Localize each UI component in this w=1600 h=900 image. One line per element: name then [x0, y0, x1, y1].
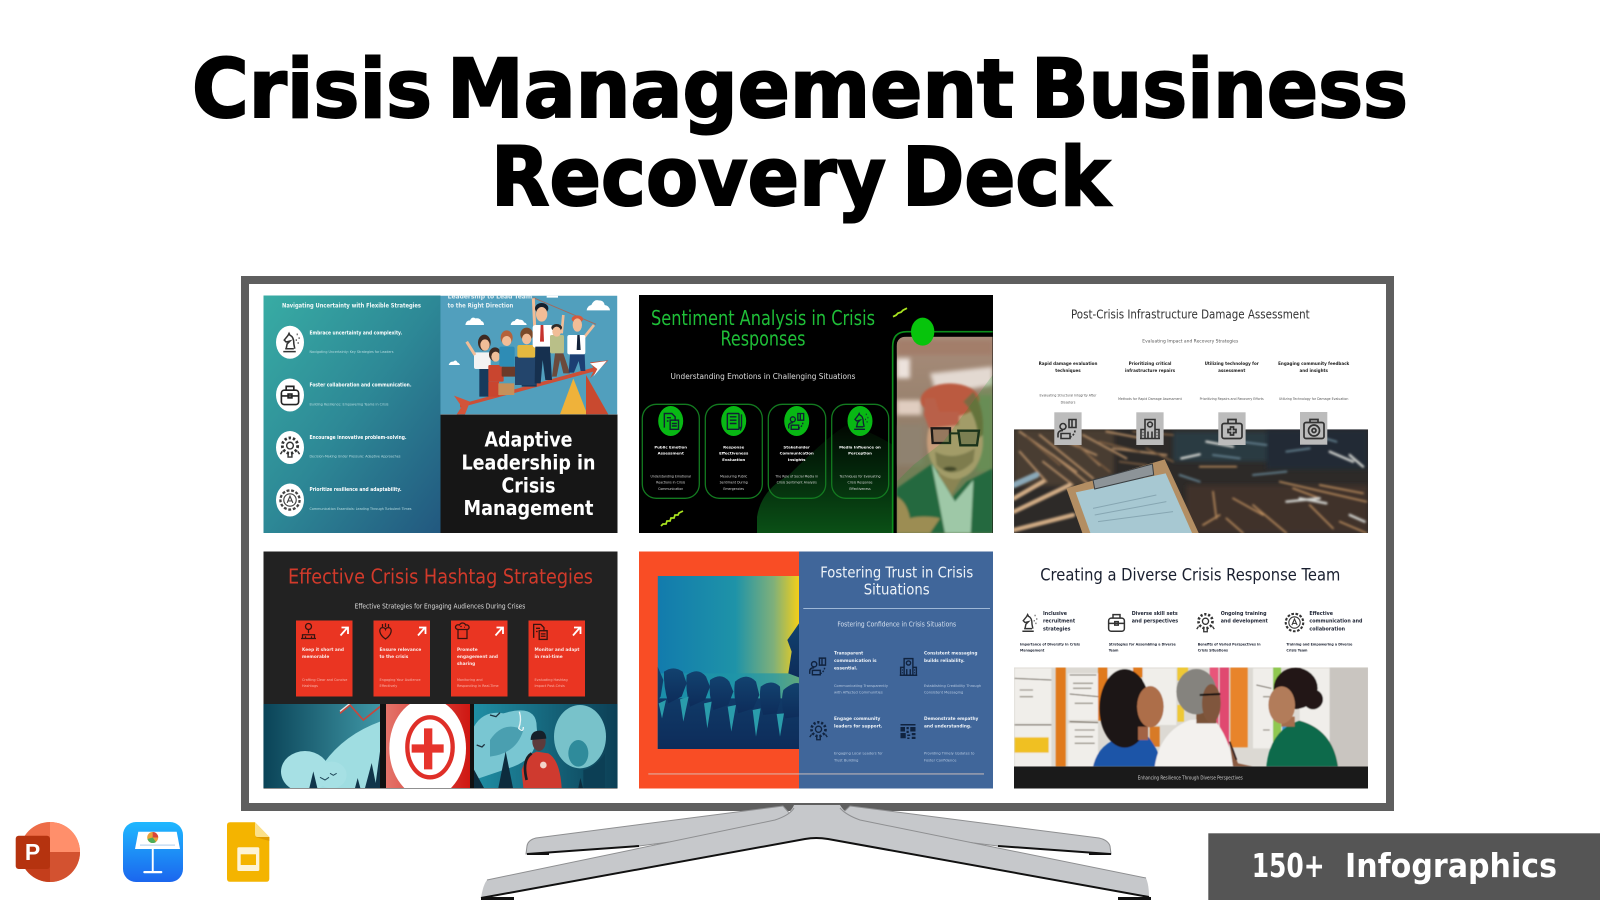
- card 4: Media Influence on: [839, 444, 881, 449]
- illustration: team on arrow: to the Right Direction: [448, 303, 513, 310]
- slide title: Management: [464, 496, 594, 520]
- item 4: collaboration: [1309, 626, 1346, 632]
- left panel list: Foster collaboration and communication.: [310, 382, 412, 388]
- card 3: Promote: [457, 647, 478, 653]
- item 1: Importance of Diversity in Crisis: [1020, 642, 1080, 646]
- card 3: sharing: [457, 661, 475, 667]
- card 2: Measuring Public: [720, 475, 747, 479]
- item 3: and development: [1221, 618, 1269, 624]
- card 2: Sentiment During: [720, 481, 748, 485]
- item 1: Transparent: [834, 650, 863, 656]
- left panel list: [310, 330, 412, 511]
- card 4: Evaluating Hashtag: [534, 678, 568, 682]
- item 1: Communicating Transparently: [834, 684, 889, 688]
- bottom rule: [648, 772, 984, 775]
- icon tiles: [1054, 412, 1327, 445]
- item 3: Ongoing training: [1221, 611, 1267, 617]
- subtitle: Fostering Confidence in Crisis Situations: [837, 620, 957, 628]
- item 4: Training and Empowering a Diverse: [1286, 642, 1353, 646]
- column notes: [1040, 394, 1348, 404]
- black background: [639, 295, 993, 533]
- item 4: Providing Timely Updates to: [924, 752, 975, 756]
- card 1: Understanding Emotional: [650, 475, 691, 479]
- monitor frame: [245, 280, 1390, 807]
- item 1: essential.: [834, 666, 858, 672]
- photo: man in glasses: [893, 318, 993, 533]
- card 3: [768, 404, 826, 498]
- title rule: [803, 607, 990, 610]
- card 1: Public Emotion: [654, 444, 687, 449]
- left panel list: Navigating Uncertainty: Key Strategies for Leaders: [310, 350, 394, 354]
- item 1: Inclusive: [1043, 611, 1068, 617]
- slide title: [820, 564, 973, 598]
- slide: hashtag strategies: [263, 552, 618, 798]
- green wave: [757, 425, 893, 533]
- column notes: Methods for Rapid Damage Assessment: [1118, 397, 1183, 401]
- item 1: recruitment: [1043, 618, 1076, 624]
- item 2: [1109, 611, 1178, 652]
- slide: fostering trust: [639, 552, 993, 788]
- card 1: memorable: [302, 654, 329, 660]
- left panel list: Communication Essentials: Leading Through Turbulent Times: [310, 507, 412, 511]
- item 4: [900, 716, 979, 762]
- card 4: Perception: [848, 451, 872, 456]
- title: Management: [447, 43, 1014, 137]
- badge: 150+ Infographics: [1208, 833, 1600, 900]
- slide: adaptive leadership: [264, 294, 618, 533]
- card 3: Communication: [780, 451, 814, 456]
- slide title: Post-Crisis Infrastructure Damage Assessment: [1071, 306, 1310, 321]
- icon: PowerPoint: P: [25, 839, 40, 865]
- item 3: Engage community: [834, 716, 881, 722]
- card 1: [642, 404, 699, 498]
- item 3: Trust Building: [833, 758, 858, 762]
- title: Deck: [902, 131, 1112, 225]
- card 1: Communication: [658, 487, 683, 491]
- card 1: Crafting Clear and Concise: [302, 678, 347, 682]
- item 4: Effective: [1309, 611, 1334, 617]
- slide title: Effective Crisis Hashtag Strategies: [288, 564, 593, 588]
- item 1: [810, 650, 889, 694]
- card 2: Effectively: [380, 684, 397, 688]
- item 4: and understanding.: [924, 724, 972, 730]
- card 3: Stakeholder: [783, 444, 810, 449]
- left panel heading: Navigating Uncertainty with Flexible Strategies: [282, 302, 421, 310]
- item 3: Crisis Situations: [1198, 648, 1228, 652]
- slide title: Fostering Trust in Crisis: [820, 564, 973, 582]
- card 3: Insights: [788, 457, 806, 462]
- card 2: Effectiveness: [719, 451, 749, 456]
- dark title panel: [440, 414, 618, 533]
- card 4: Monitor and adapt: [534, 647, 579, 653]
- card 2: Emergencies: [723, 487, 744, 491]
- card 4: Crisis Response: [848, 481, 873, 485]
- column notes: Evaluating Structural Integrity After: [1040, 394, 1097, 398]
- card 1: Reactions in Crisis: [656, 481, 686, 485]
- card 2: to the crisis: [380, 654, 409, 660]
- column notes: Utilizing Technology for Damage Evaluation: [1279, 397, 1348, 401]
- card 1: [296, 620, 352, 696]
- icon: Google Slides: [227, 822, 269, 882]
- card 4: Effectiveness: [849, 487, 871, 491]
- slide title: [651, 306, 875, 350]
- item 3: Benefits of Varied Perspectives in: [1198, 642, 1261, 646]
- card 3: Monitoring and: [457, 678, 483, 682]
- item 3: [810, 716, 883, 762]
- slide title: [462, 428, 596, 520]
- item 4: communication and: [1309, 618, 1363, 624]
- slide title: Leadership in: [462, 450, 596, 474]
- title: [192, 43, 1408, 225]
- icon: Keynote: [123, 822, 183, 882]
- item 3: [1197, 611, 1269, 652]
- slide title: Situations: [864, 580, 930, 598]
- item 1: communication is: [834, 658, 877, 664]
- item 2: Strategies for Assembling a Diverse: [1109, 642, 1176, 646]
- item 2: Consistent Messaging: [924, 690, 963, 694]
- item 3: Engaging Local Leaders for: [834, 752, 883, 756]
- slide title: Crisis: [502, 474, 556, 498]
- item 2: Consistent messaging: [924, 650, 977, 656]
- decorative squiggles: [661, 308, 907, 526]
- monitor stand: [481, 805, 1151, 900]
- left panel list: Embrace uncertainty and complexity.: [310, 330, 402, 336]
- left panel list: Decision-Making Under Pressure: Adaptive Approaches: [310, 454, 401, 458]
- badge: 150+ Infographics: Infographics: [1345, 846, 1557, 885]
- item 3: leaders for support.: [834, 724, 883, 730]
- column notes: Disasters: [1061, 400, 1076, 404]
- left teal panel: [264, 296, 440, 533]
- item 1: with Affected Communities: [834, 690, 883, 694]
- item 4: Demonstrate empathy: [924, 716, 979, 722]
- image: silhouettes: [658, 576, 799, 749]
- card 2: Ensure relevance: [380, 647, 421, 653]
- item 2: Diverse skill sets: [1132, 611, 1178, 617]
- card 2: Evaluation: [722, 457, 746, 462]
- column headings: and insights: [1299, 368, 1328, 373]
- slide title: Creating a Diverse Crisis Response Team: [1040, 566, 1340, 586]
- item 2: Establishing Credibility Through: [924, 684, 981, 688]
- left panel list: Prioritize resilience and adaptability.: [310, 487, 402, 493]
- card 1: Hashtags: [302, 684, 318, 688]
- slide: infrastructure damage: [1014, 306, 1368, 533]
- item 4: [1286, 611, 1363, 652]
- card 2: Engaging Your Audience: [380, 678, 421, 682]
- column headings: techniques: [1055, 368, 1081, 373]
- icon circles: [276, 326, 304, 516]
- card 2: [374, 620, 430, 696]
- column headings: Prioritizing critical: [1129, 361, 1172, 366]
- badge: 150+ Infographics: 150+: [1252, 846, 1325, 885]
- blue panel: [799, 552, 993, 788]
- column headings: infrastructure repairs: [1125, 368, 1176, 373]
- column headings: assessment: [1218, 368, 1245, 373]
- card 3: [451, 620, 508, 696]
- illustration: team on arrow: [440, 294, 617, 414]
- illustration: team on arrow: Leadership to Lead Team: [448, 294, 532, 301]
- card 1: Keep it short and: [302, 647, 344, 653]
- caption: Enhancing Resilience Through Diverse Perspectives: [1138, 776, 1243, 782]
- column headings: Rapid damage evaluation: [1039, 361, 1097, 366]
- icon: PowerPoint: [16, 822, 80, 882]
- item 2: and perspectives: [1132, 618, 1178, 624]
- card 4: [832, 404, 889, 498]
- dark background: [264, 552, 618, 788]
- slide title: Sentiment Analysis in Crisis: [651, 306, 875, 330]
- slide title: Responses: [720, 326, 806, 350]
- item 2: Team: [1109, 648, 1119, 652]
- item 1: [1020, 611, 1080, 652]
- item 4: Foster Confidence: [924, 758, 957, 762]
- column notes: Prioritizing Repairs and Recovery Efforts: [1200, 397, 1264, 401]
- item 4: Crisis Team: [1286, 648, 1308, 652]
- slide: diverse response team: [1014, 566, 1368, 788]
- card 1: Assessment: [658, 451, 684, 456]
- item 2: [900, 650, 981, 694]
- subtitle: Understanding Emotions in Challenging Situations: [670, 371, 856, 381]
- card 3: engagement and: [457, 654, 498, 660]
- column headings: [1039, 361, 1350, 373]
- card 3: The Role of Social Media in: [774, 475, 818, 479]
- photo: team at wall: [1014, 667, 1368, 767]
- subtitle: Effective Strategies for Engaging Audiences During Crises: [355, 602, 526, 610]
- title: Crisis: [192, 43, 432, 137]
- column headings: Utilizing technology for: [1205, 361, 1259, 366]
- illustration strip: [263, 704, 618, 788]
- card 3: Responding in Real-Time: [457, 684, 499, 688]
- orange side: [639, 552, 799, 788]
- left panel list: Building Resilience: Empowering Teams in Crisis: [310, 402, 389, 406]
- card 4: Techniques for Evaluating: [838, 475, 881, 479]
- item 2: builds reliability.: [924, 658, 965, 664]
- column headings: Engaging community feedback: [1278, 361, 1350, 366]
- item 1: strategies: [1043, 626, 1071, 632]
- subtitle: Evaluating Impact and Recovery Strategies: [1142, 339, 1239, 345]
- card 4: Impact Post-Crisis: [534, 684, 565, 688]
- caption bar: [1014, 766, 1368, 788]
- slide title: Adaptive: [484, 428, 572, 452]
- title: Recovery: [491, 131, 886, 225]
- title: Business: [1031, 43, 1408, 137]
- card 2: Response: [723, 444, 745, 449]
- photo: debris and clipboard: [1014, 429, 1368, 533]
- item 1: Management: [1020, 648, 1045, 652]
- card 2: [705, 404, 762, 498]
- left panel list: Encourage innovative problem-solving.: [310, 435, 407, 441]
- card 3: Crisis Sentiment Analysis: [777, 481, 817, 485]
- slide: sentiment analysis: [639, 295, 993, 533]
- card 4: [528, 620, 585, 696]
- card 4: in real-time: [534, 654, 563, 660]
